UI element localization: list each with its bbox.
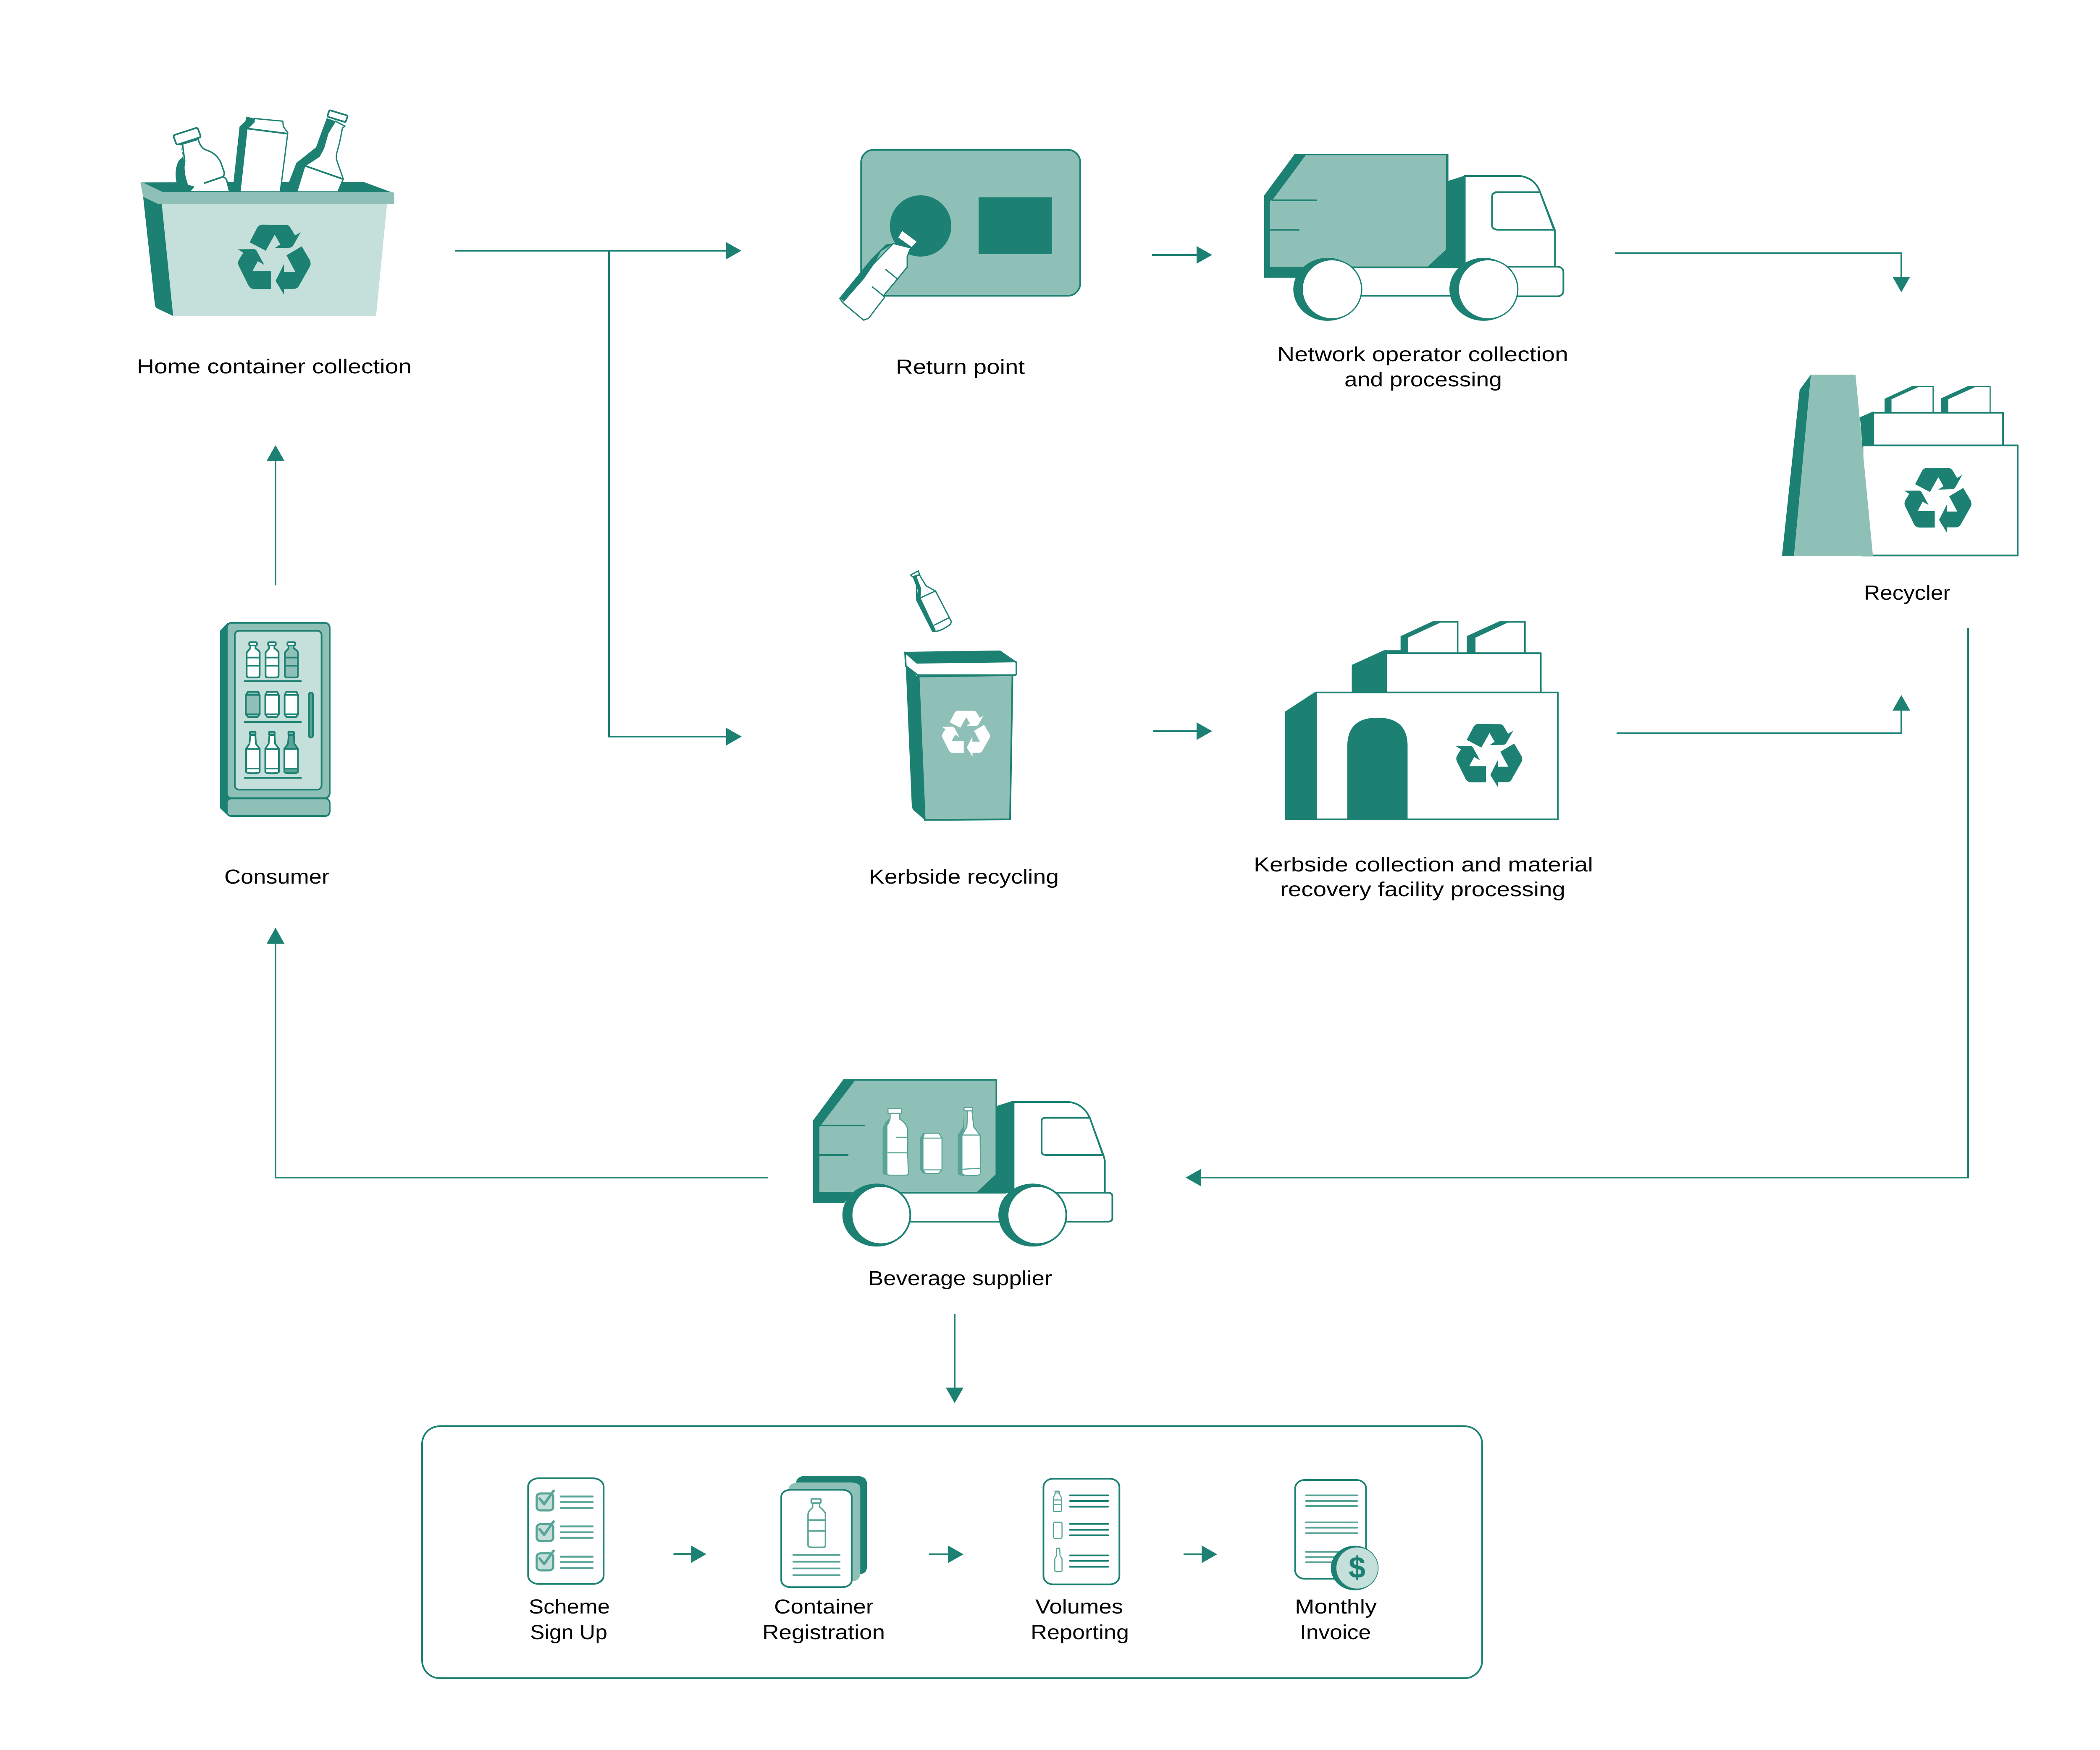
label: home container collection: Home container collection [137,356,412,378]
label: monthly invoice: Invoice [1300,1621,1371,1644]
label: volumes reporting: Volumes [1035,1596,1123,1618]
label: return point: Return point [896,356,1025,378]
icon: scheme sign up checklist [528,1478,604,1584]
label: scheme sign up: Sign Up [530,1621,607,1644]
label: volumes reporting: Reporting [1031,1621,1129,1644]
arrow: sign up to registration [675,1545,706,1563]
arrow: material recovery facility to recycler [1617,695,1910,733]
label: network operator collection and processing [1277,344,1568,391]
icon: container registration documents [781,1476,867,1587]
icon: material recovery facility [1285,621,1558,820]
icon: plastic bottle in bin [173,128,230,192]
arrow: home to return point and kerbside [455,242,742,745]
arrow: return point to network operator [1152,246,1212,264]
icon: glass bottle in bin [281,110,348,192]
arrow: beverage supplier to consumer [267,928,768,1178]
icon: recycler factory [1782,375,2018,556]
label: monthly invoice [1295,1596,1377,1644]
icon: truck wheels [843,1183,1067,1246]
icon: monthly invoice document with coin [1295,1480,1378,1590]
label: container registration: Container [774,1596,874,1618]
arrow: beverage supplier to admin process [946,1314,963,1403]
label: kerbside recycling: Kerbside recycling [869,866,1059,888]
arrow: network operator to recycler [1615,253,1910,292]
label: kerbside collection and material recovery facility processing [1254,854,1593,901]
icon: return point machine [840,150,1080,320]
label: volumes reporting [1031,1596,1129,1644]
label: recycler: Recycler [1864,582,1950,604]
icon: plastic bottle on truck [883,1108,908,1175]
label: container registration [762,1596,885,1644]
icon: beverage supplier truck [813,1079,1112,1246]
icon: monthly invoice document with coin: $ [1349,1551,1365,1585]
arrow: recycler to beverage supplier [1186,628,1968,1186]
icon: kerbside bin [905,651,1016,820]
icon: network operator truck [1264,154,1563,321]
arrow: registration to reporting [929,1545,963,1563]
label: container registration: Registration [762,1621,885,1644]
arrow: reporting to invoice [1184,1545,1217,1563]
icon: can in bin [233,116,288,192]
label: monthly invoice: Monthly [1295,1596,1377,1618]
label: kerbside collection and material recovery facility processing: recovery facility processing [1280,879,1565,901]
label: network operator collection and processing: and processing [1344,369,1502,391]
arrow: kerbside to material recovery facility [1153,722,1212,740]
icon: consumer fridge [220,623,330,816]
icon: cans on middle shelf [246,692,298,717]
icon: glass bottle on truck [958,1107,981,1176]
label: consumer: Consumer [224,866,329,888]
icon: glass bottles on lower shelf [246,732,298,773]
icon: plastic bottles on top shelf [247,642,298,677]
label: kerbside collection and material recovery facility processing: Kerbside collection and material [1254,854,1593,876]
label: scheme sign up [529,1596,610,1644]
icon: home container bin [140,110,394,316]
icon: truck wheels [1293,258,1518,321]
icon: volumes reporting document [1043,1479,1119,1585]
icon: can on truck [920,1133,942,1173]
icon: bottle falling into kerbside bin [911,571,951,632]
label: scheme sign up: Scheme [529,1596,610,1618]
label: network operator collection and processing: Network operator collection [1277,344,1568,366]
arrow: consumer to home container [267,445,284,585]
panel: supplier admin process [422,1426,1482,1678]
label: beverage supplier: Beverage supplier [868,1267,1052,1290]
icon: checklist rows [537,1491,593,1570]
icon: bottle entering slot [840,231,916,320]
